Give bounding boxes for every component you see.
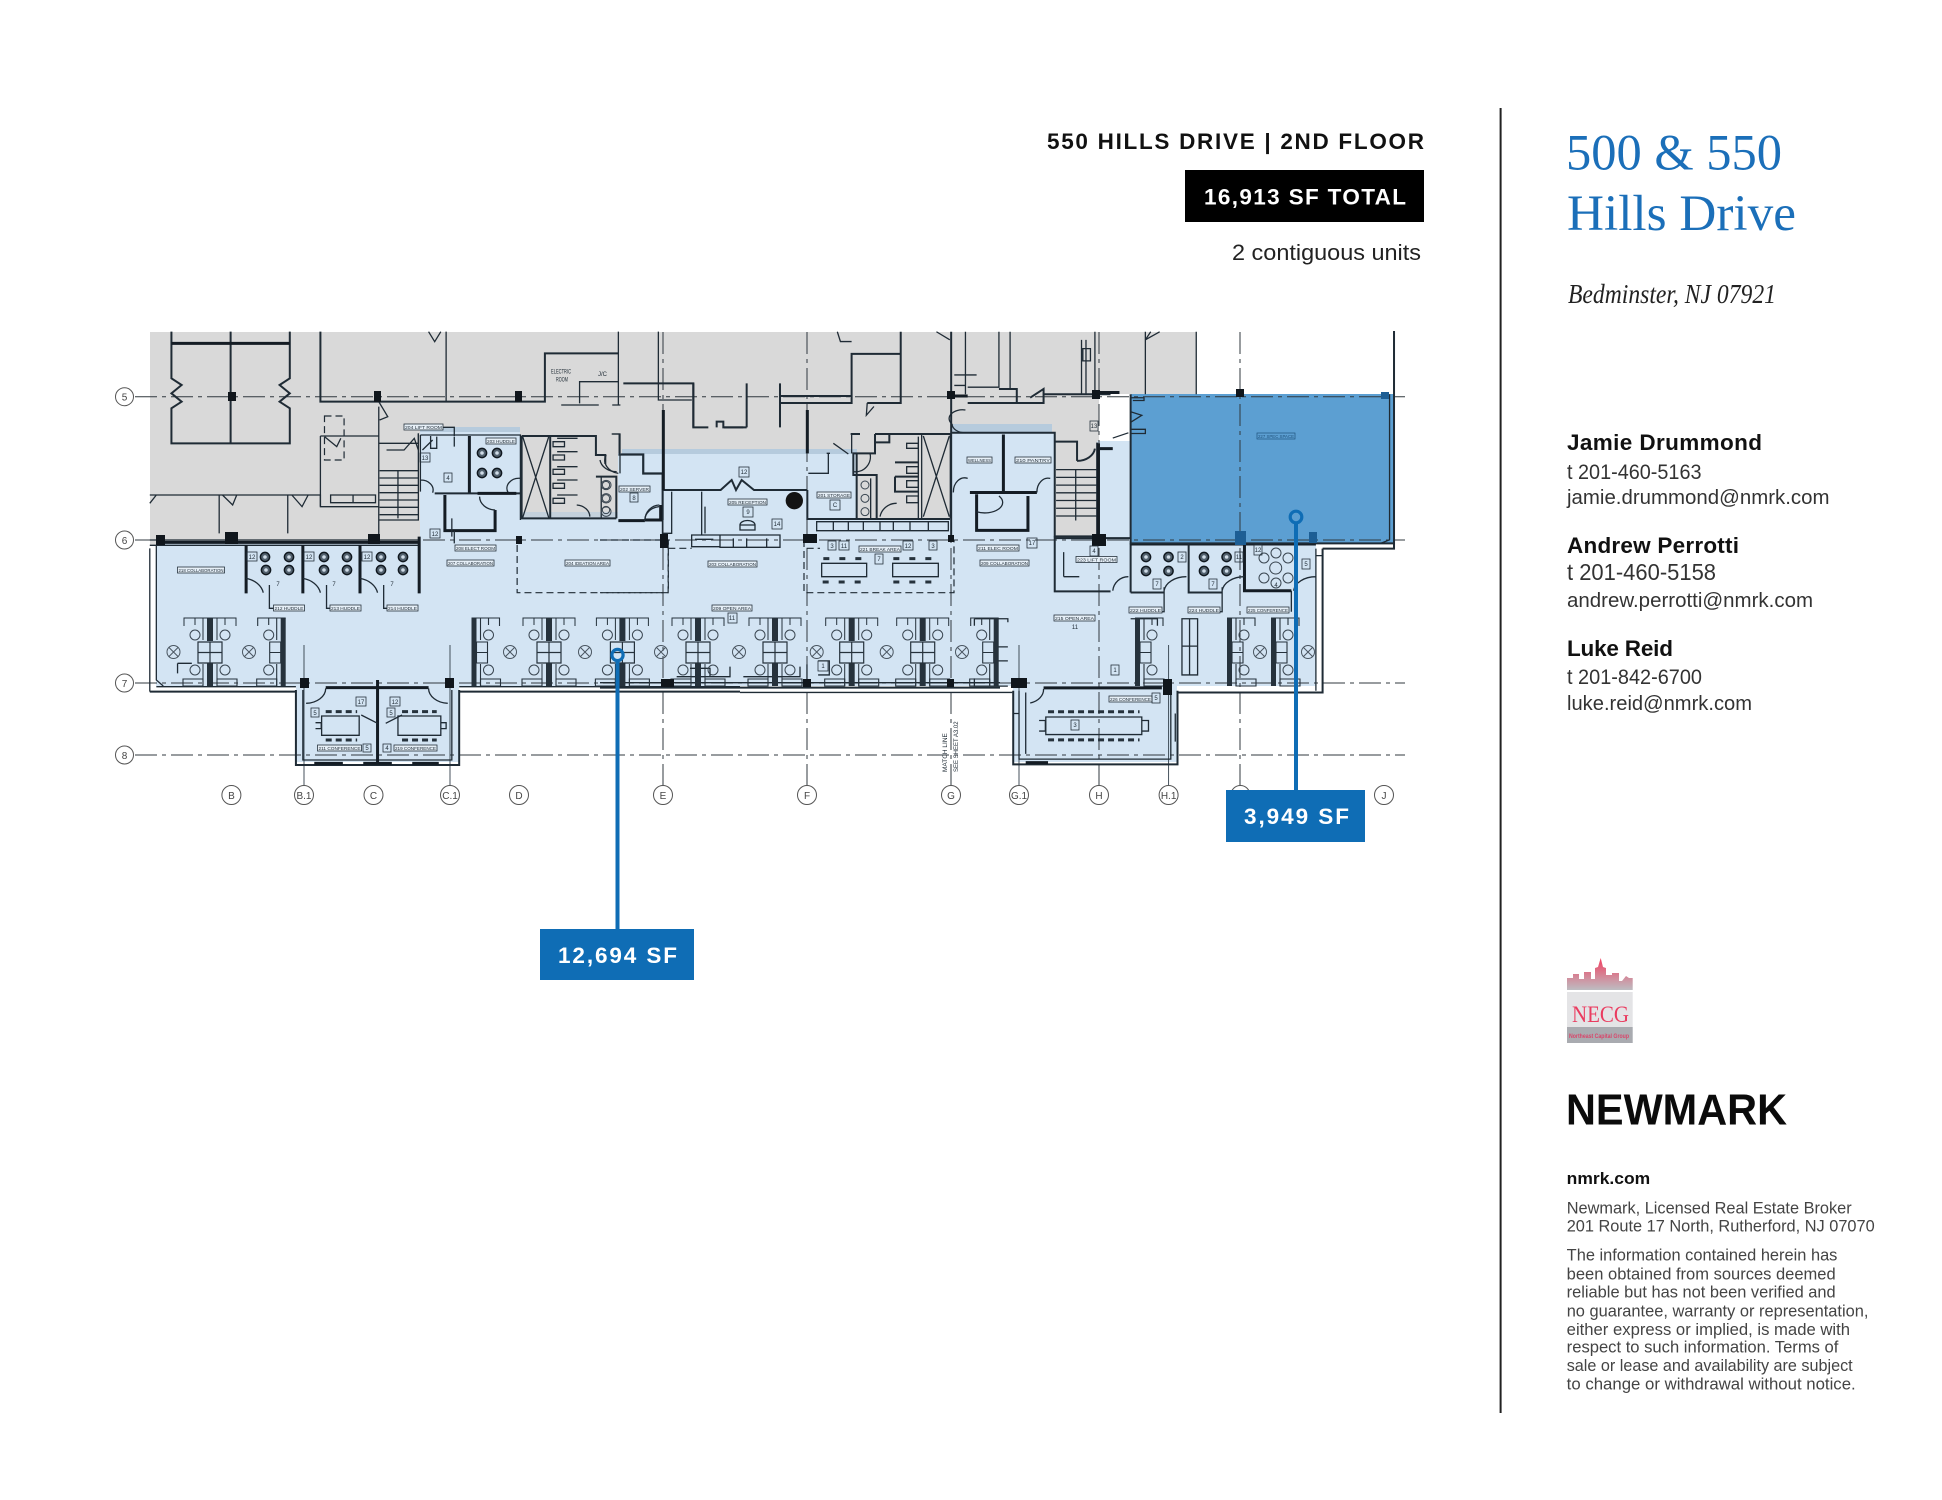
contact: Jamie Drummond: t 201-460-5163 (1567, 460, 1702, 484)
contact: Andrew Perrotti (1567, 533, 1813, 612)
room number tags: 14 (774, 522, 781, 528)
disclaimer (1567, 1247, 1868, 1393)
room number tags: 5 (1304, 562, 1308, 568)
broker address: 201 Route 17 North, Rutherford, NJ 07070 (1567, 1218, 1875, 1236)
room labels: 204 LIFT ROOM (405, 425, 442, 430)
room number tags: 11 (729, 616, 736, 622)
room number tags: 12 (905, 544, 912, 550)
contact: Luke Reid: t 201-842-6700 (1567, 665, 1702, 689)
room labels: 226 CONFERENCE (1110, 697, 1151, 702)
contact: Andrew Perrotti: Andrew Perrotti (1567, 533, 1739, 558)
grid bubbles: 5 (122, 392, 128, 404)
room number tags: 12 (364, 555, 371, 561)
grid bubbles: B (228, 791, 235, 802)
huddle room chairs (260, 448, 1293, 588)
room number tags: 5 (1154, 696, 1158, 702)
sidebar title: 500 & 550 (1566, 126, 1782, 182)
contact: Andrew Perrotti: t 201-460-5158 (1567, 559, 1716, 585)
contact: Jamie Drummond (1566, 430, 1830, 509)
room number tags: 7 (332, 582, 336, 588)
room labels: 203 COLLABORATION (709, 562, 756, 567)
grid bubbles: B.1 (296, 791, 312, 802)
room labels: 223 LIFT ROOM (1077, 558, 1116, 562)
room number tags: 3 (931, 544, 935, 550)
room labels: 211 CONFERENCE (318, 746, 360, 751)
room number tags: 17 (1029, 541, 1036, 547)
sidebar title: Hills Drive (1567, 186, 1796, 242)
room number tags: 11 (1072, 625, 1079, 631)
room labels: 222 HUDDLE (1130, 608, 1161, 613)
walls: right part (740, 331, 1394, 764)
room number tags: 5 (389, 711, 393, 717)
room number tags: 7 (1211, 582, 1215, 588)
room number tags: 12 (1255, 548, 1262, 554)
unit: 3,949 SF dark blue area (1131, 394, 1394, 543)
grid bubbles: 6 (122, 536, 128, 547)
floor plan (116, 331, 1405, 804)
structural columns (156, 389, 1389, 695)
room labels: 215 OPEN AREA (1055, 616, 1095, 621)
common area: gray (150, 332, 1196, 545)
disclaimer: sale or lease and availability are subject (1567, 1357, 1853, 1375)
room number tags: 7 (877, 557, 881, 563)
room labels: ROOM (556, 378, 568, 384)
room labels: 205 RECEPTION (729, 500, 766, 505)
room labels: 213 HUDDLE (331, 606, 360, 611)
grid bubbles: E (660, 791, 667, 802)
room labels: 211 ELEC ROOM (978, 546, 1018, 551)
logo: NECG: Northeast Capital Group (1569, 1034, 1629, 1040)
room number tags: 13 (1091, 424, 1098, 430)
room number tags: C (833, 503, 838, 509)
room number tags: 5 (365, 746, 369, 752)
website: nmrk.com (1567, 1169, 1650, 1188)
room labels: 204 IDEATION AREA (566, 561, 610, 566)
room labels: 202 SERVER (620, 487, 650, 492)
grid lines (135, 332, 1405, 785)
room labels: ELECTRIC (551, 370, 571, 376)
ceiling fixtures (167, 646, 1314, 658)
contact: Jamie Drummond: Jamie Drummond (1567, 430, 1762, 455)
room number tags: 7 (390, 582, 394, 588)
room labels: 207 COLLABORATION (448, 561, 493, 566)
room number tags: 5 (313, 711, 317, 717)
room labels: 221 BREAK AREA (860, 547, 901, 552)
disclaimer: The information contained herein has (1567, 1247, 1837, 1265)
room labels: MATCH LINE (942, 732, 949, 772)
grid bubbles: H (1095, 791, 1103, 802)
workstations (183, 618, 1300, 686)
room number tags: 4 (1274, 583, 1278, 589)
logo: Newmark: NEWMARK (1566, 1086, 1787, 1134)
room number tags: 17 (358, 700, 365, 706)
room number tags: 11 (841, 544, 848, 550)
contact: Andrew Perrotti: andrew.perrotti@nmrk.com (1567, 589, 1813, 612)
room number tags: 12 (249, 555, 256, 561)
grid bubbles: H.1 (1161, 791, 1177, 802)
disclaimer: no guarantee, warranty or representation, (1567, 1303, 1868, 1321)
disclaimer: reliable but has not been verified and (1567, 1284, 1836, 1302)
room number tags: 12 (432, 532, 439, 538)
room labels: 224 HUDDLE (1189, 608, 1219, 613)
logo: NECG: NECG (1572, 1002, 1629, 1027)
subheading: contiguous units: 2 contiguous units (1232, 240, 1421, 265)
room labels (178, 370, 1295, 772)
walls: centre part (600, 383, 1000, 688)
contact: Luke Reid: luke.reid@nmrk.com (1567, 692, 1752, 715)
grid bubbles: 8 (122, 751, 128, 762)
grid bubbles: G.1 (1011, 791, 1027, 802)
room labels: 225 CONFERENCE (1248, 608, 1288, 613)
total area badge: 16,913 SF TOTAL (1204, 184, 1406, 210)
grid bubbles: G (947, 791, 955, 802)
room labels: 201 STORAGE (818, 493, 850, 498)
callout: 12,694 SF: 12,694 SF (558, 943, 677, 968)
room number tags: 9 (746, 510, 750, 516)
room number tags: 2 (1180, 555, 1184, 561)
grid bubbles: J (1382, 791, 1386, 802)
grid bubbles: C.1 (442, 791, 458, 802)
room labels: 210 PANTRY (1016, 458, 1050, 463)
disclaimer: been obtained from sources deemed (1567, 1265, 1836, 1283)
broker address (1567, 1199, 1875, 1236)
callout: 12,694 SF (540, 649, 694, 980)
room number tags: 12 (392, 700, 399, 706)
broker address: Newmark, Licensed Real Estate Broker (1567, 1199, 1852, 1217)
room number tags: 12 (741, 470, 748, 476)
location: Bedminster, NJ 07921 (1568, 279, 1776, 309)
unit: 12,694 SF light blue area (156, 432, 1316, 762)
callout: 3,949 SF (1226, 511, 1365, 842)
grid bubbles (116, 388, 1394, 804)
grid bubbles: 7 (122, 679, 128, 690)
room labels: 209 COLLABORATION (981, 561, 1028, 566)
room number tags: 1 (821, 664, 825, 670)
callout: 3,949 SF: 3,949 SF (1244, 804, 1349, 829)
room number tags: 7 (276, 582, 280, 588)
room labels: SEE SHEET A3.02 (954, 721, 960, 772)
room number tags: 3 (830, 544, 834, 550)
disclaimer: to change or withdrawal without notice. (1567, 1375, 1856, 1393)
room number tags: 12 (306, 555, 313, 561)
heading: building and floor: 550 HILLS DRIVE | 2ND FLOOR (1047, 129, 1424, 154)
room number tags: 8 (632, 496, 636, 502)
room labels: 209 OPEN AREA (713, 606, 752, 611)
room labels: J/C (598, 372, 608, 378)
room labels: 212 HUDDLE (274, 606, 304, 611)
disclaimer: respect to such information. Terms of (1567, 1339, 1839, 1357)
total area badge (1185, 170, 1424, 222)
contact: Luke Reid: Luke Reid (1567, 636, 1673, 661)
room number tags: 13 (422, 456, 429, 462)
room labels: 227 SPEC SPACE (1258, 434, 1294, 439)
disclaimer: either express or implied, is made with (1567, 1321, 1850, 1339)
room labels: 214 HUDDLE (388, 606, 417, 611)
grid bubbles: D (515, 791, 523, 802)
room number tags: 11 (1236, 555, 1243, 561)
grid bubbles: C (370, 791, 377, 802)
room labels: 218 COLLABORATION (178, 568, 224, 573)
room number tags: 4 (385, 746, 389, 752)
room labels: WELLNESS (968, 458, 991, 463)
grid bubbles: F (804, 791, 810, 802)
room number tags: 4 (1092, 549, 1096, 555)
room labels: 219 CONFERENCE (395, 746, 436, 751)
contact: Luke Reid (1567, 636, 1752, 715)
room number tags: 4 (446, 476, 450, 482)
walls: left part (150, 332, 740, 765)
sidebar title (1566, 126, 1796, 242)
sidebar divider (1500, 108, 1502, 1413)
room labels: 208 ELECT ROOM (456, 546, 495, 551)
room number tags: 1 (1113, 668, 1117, 674)
logo: NECG (1567, 958, 1633, 1043)
room labels: 203 HUDDLE (487, 439, 515, 444)
room number tags: 3 (1073, 723, 1077, 729)
contact: Jamie Drummond: jamie.drummond@nmrk.com (1566, 486, 1830, 509)
room number tags: 7 (1155, 582, 1159, 588)
room number tags (247, 421, 1310, 752)
